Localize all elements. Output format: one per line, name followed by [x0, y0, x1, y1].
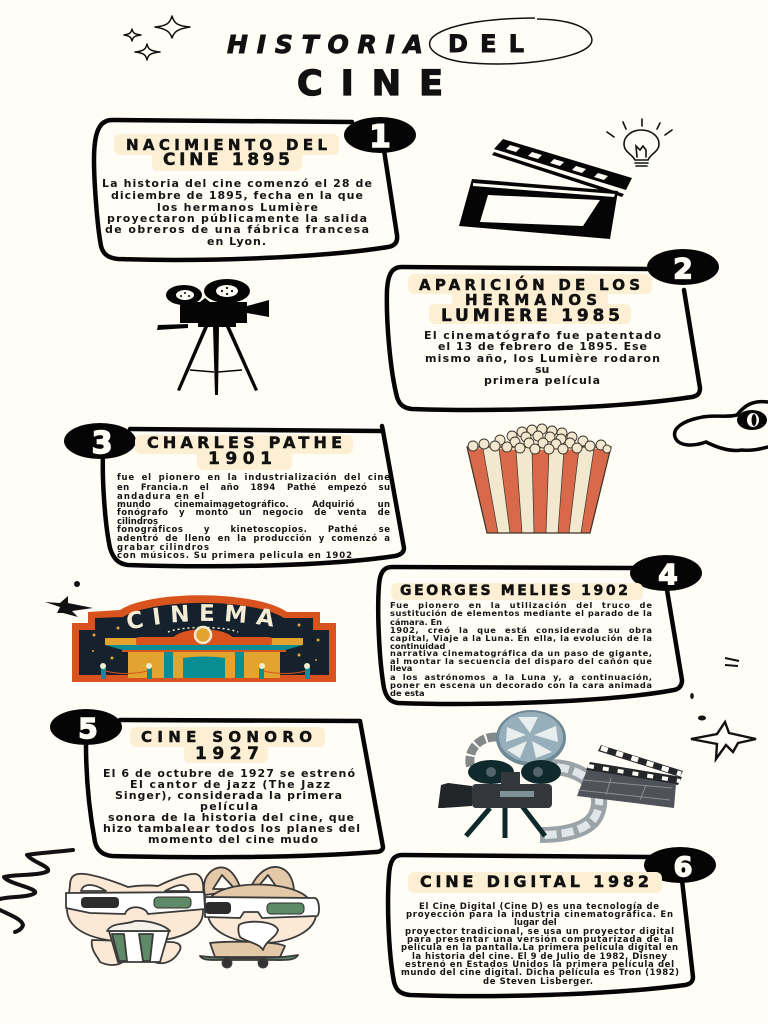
icon: light bulb	[607, 119, 672, 166]
heading highlight 4	[391, 583, 643, 600]
body text 6: para presentar una versión computarizada de la	[407, 934, 673, 945]
body text 6: de Steven Lisberger.	[483, 977, 593, 987]
body text 5: sonora de la historia del cine, que	[108, 811, 354, 824]
body text 2	[424, 329, 661, 387]
heading 5: CINE SONORO	[141, 728, 312, 746]
heading 2: APARICIÓN DE LOS	[419, 275, 640, 294]
body text 3: mundo cinemaimagetográfico. Adquirió un	[117, 499, 390, 510]
number badge 6	[644, 847, 716, 883]
body text 6: estrenó en Estados Unidos la primera película del	[405, 959, 674, 970]
panel: georges melies	[378, 555, 702, 704]
heading 3: 1901	[208, 449, 272, 469]
body text 6: película en la pantalla.La primera película digital en	[401, 943, 678, 953]
body text 6: El Cine Digital (Cine D) es una tecnología de	[419, 902, 659, 912]
heading highlight 3	[135, 435, 353, 470]
panel outline 3	[103, 426, 404, 566]
illustration: film camera on tripod	[157, 279, 269, 395]
body text 2: El cinematógrafo fue patentado	[424, 329, 661, 342]
body text 3: fonográficos y kinetoscopios. Pathé se	[117, 524, 390, 535]
heading 5: 1927	[195, 744, 259, 764]
number badge 2	[647, 249, 719, 285]
body text 4: lleva	[390, 663, 412, 673]
title: HISTORIA	[227, 30, 423, 59]
title: CINE	[297, 64, 443, 104]
body text 5: película	[200, 800, 258, 813]
panel outline 5	[86, 720, 383, 857]
body text 2: primera película	[484, 374, 600, 387]
heading 6: CINE DIGITAL 1982	[420, 872, 649, 891]
heading 3: CHARLES PATHE	[147, 433, 342, 452]
body text 4: 1902, creó la que está considerada su obra	[390, 625, 652, 635]
heading 1: NACIMIENTO DEL	[126, 136, 327, 154]
icon: sparkles	[124, 16, 190, 60]
panel outline 4	[378, 567, 682, 704]
title	[227, 18, 592, 104]
body text 2: su	[535, 363, 549, 376]
heading 2	[419, 275, 640, 326]
body text 4: sustitución de elementos mediante el parado de la	[390, 608, 652, 618]
body text 4: de esta	[390, 688, 425, 698]
panel: cine sonoro	[50, 709, 383, 857]
illustration: two cats with 3D glasses	[66, 867, 319, 968]
body text 3: andadura en el	[117, 492, 204, 502]
icon: squiggle	[0, 850, 73, 932]
cinema sign text: CINEMA	[127, 604, 273, 628]
body text 6	[401, 902, 679, 987]
body text 3	[117, 472, 390, 561]
heading highlight 2	[408, 274, 652, 324]
heading 3	[147, 433, 342, 469]
number badge 4	[630, 555, 702, 591]
body text 3: fue el pionero en la industrialización del cine	[117, 472, 390, 483]
body text 4: Fue pionero en la utilización del truco de	[390, 600, 652, 610]
panel outline 6	[388, 855, 693, 996]
body text 4: capital, Viaje a la Luna. En ella, la evolución de la	[390, 633, 652, 643]
body text 1: proyectaron públicamente la salida	[107, 212, 367, 225]
body text 4: a los astrónomos a la Luna y, a continuación,	[390, 672, 652, 682]
body text 5: hizo tambalear todos los planes del	[103, 822, 360, 835]
back cat	[200, 867, 319, 968]
body text 3: cilindros	[117, 517, 158, 527]
body text 5	[103, 767, 360, 846]
heading 2: HERMANOS	[465, 291, 597, 309]
body text 4: al montar la secuencia del disparo del cañón que	[390, 656, 652, 666]
illustration: camera, reel and clapperboard	[438, 710, 683, 838]
body text 5: El cantor de jazz (The Jazz	[130, 778, 330, 791]
body text 6: mundo del cine digital. Dicha película es Tron (1982)	[401, 968, 679, 978]
body text 4: narrativa cinematográfica da un paso de gigante,	[390, 648, 652, 658]
heading 5	[141, 728, 312, 764]
number badge 1: 1	[369, 119, 391, 155]
number badge 3	[64, 423, 136, 461]
body text 3: fonógrafo y montó un negocio de venta de	[117, 507, 390, 518]
front cat	[66, 874, 205, 965]
body text 5: El 6 de octubre de 1927 se estrenó	[103, 767, 355, 780]
number badge 2: 2	[673, 252, 693, 285]
body text 1	[102, 177, 372, 248]
illustration: cinema marquee	[72, 595, 336, 682]
heading 2: LUMIERE 1985	[441, 306, 620, 326]
panel outline 2	[387, 267, 700, 410]
body text 6: lugar del	[514, 918, 557, 928]
body text 4	[390, 600, 652, 698]
icon: left star and dot	[45, 581, 93, 617]
body text 3: en Francia.n el año 1894 Pathé empezó su	[117, 482, 390, 493]
illustration: clapperboard	[459, 139, 632, 239]
body text 4: cámara. En	[390, 617, 442, 627]
number badge 5: 5	[78, 712, 98, 745]
body text 5: Singer), considerada la primera	[115, 789, 342, 802]
body text 4: continuidad	[390, 641, 446, 651]
body text 3: grabar cilindros	[117, 543, 209, 553]
body text 3: con músicos. Su primera pelicula en 1902	[117, 551, 352, 561]
number badge 3: 3	[92, 426, 112, 461]
number badge 6: 6	[674, 852, 692, 883]
heading 1: CINE 1895	[163, 150, 290, 170]
body text 6: proyección para la industria cinematográfica. En	[406, 909, 673, 920]
heading highlight 6	[408, 872, 662, 893]
icon: egg doodle	[675, 402, 768, 450]
body text 1: los hermanos Lumière	[157, 201, 318, 214]
panel outline 1	[94, 120, 397, 260]
panel: cine digital	[388, 847, 716, 996]
panel: charles pathe	[64, 423, 404, 566]
title: DEL	[448, 30, 524, 58]
body text 2: mismo año, los Lumière rodaron	[425, 352, 660, 365]
number badge 4: 4	[658, 558, 678, 591]
number badge 1	[344, 117, 416, 155]
body text 1: La historia del cine comenzó el 28 de	[102, 177, 372, 190]
heading highlight 1	[114, 134, 339, 171]
body text 1: diciembre de 1895, fecha en la que	[111, 189, 363, 202]
body text 2: el 13 de febrero de 1895. Ese	[438, 340, 647, 353]
number badge 5	[50, 709, 122, 745]
body text 6: la historia del cine. El 9 de Julio de 1982, Disney	[412, 952, 667, 962]
heading highlight 5	[130, 727, 325, 763]
panel: aparicion de los hermanos	[387, 249, 719, 410]
illustration: popcorn bucket	[467, 424, 611, 533]
icon: right doodles and star	[690, 658, 756, 759]
body text 1: de obreros de una fábrica francesa	[105, 223, 369, 236]
heading 1	[126, 136, 327, 170]
body text 4: poner en escena un decorado con la cara animada	[390, 680, 652, 690]
body text 1: en Lyon.	[207, 235, 266, 248]
body text 6: proyector tradicional, se usa un proyector digital	[405, 927, 674, 937]
body text 3: adentró de lleno en la producción y comenzó a	[117, 533, 390, 544]
body text 5: momento del cine mudo	[148, 833, 318, 846]
panel: nacimiento del cine	[94, 117, 416, 260]
heading 4: GEORGES MELIES 1902	[400, 583, 628, 599]
